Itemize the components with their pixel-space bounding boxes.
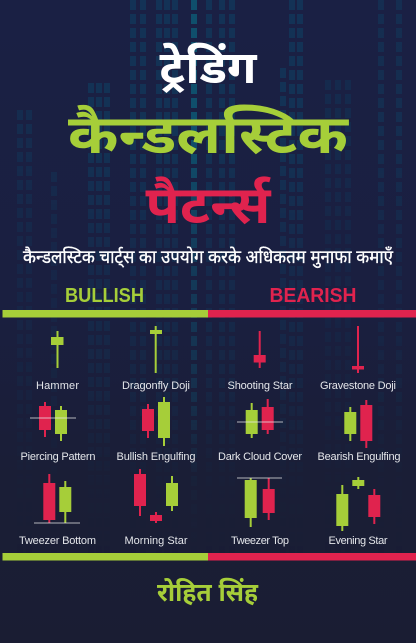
subtitle: कैन्डलस्टिक चार्ट्स का उपयोग करके अधिकतम मुनाफा कमाएँ <box>23 246 394 269</box>
heading: bullish: BULLISH <box>65 284 144 307</box>
heading: bearish: BEARISH <box>270 284 356 307</box>
candle: hammer <box>51 331 64 368</box>
title: trading: ट्रेडिंग <box>160 42 258 94</box>
title: candlestick: कैन्डलस्टिक <box>68 104 349 165</box>
candle: piercing pattern <box>30 402 76 441</box>
label: bearish engulfing: Bearish Engulfing <box>318 451 400 463</box>
label: morning star: Morning Star <box>124 535 188 547</box>
label: hammer: Hammer <box>36 380 79 392</box>
label: dragonfly doji: Dragonfly Doji <box>122 380 190 392</box>
label: tweezer bottom: Tweezer Bottom <box>19 535 96 547</box>
bottom bar <box>2 553 416 560</box>
label: shooting star: Shooting Star <box>228 380 293 392</box>
candle: dark cloud cover <box>237 399 283 438</box>
label: bullish engulfing: Bullish Engulfing <box>116 451 196 463</box>
label: tweezer top: Tweezer Top <box>231 535 289 547</box>
candle: bullish engulfing <box>142 397 170 446</box>
candle: tweezer bottom <box>34 474 80 524</box>
candle: evening star <box>336 477 380 531</box>
label: gravestone doji: Gravestone Doji <box>320 380 396 392</box>
candle: dragonfly doji <box>150 326 162 373</box>
title: patterns: पैटर्न्स <box>146 176 272 235</box>
label: dark cloud cover: Dark Cloud Cover <box>218 451 302 463</box>
candle: shooting star <box>254 331 266 368</box>
author: रोहित सिंह <box>157 577 259 607</box>
candle: gravestone doji <box>352 326 364 373</box>
candle: morning star <box>134 469 178 523</box>
candle: bearish engulfing <box>344 400 372 448</box>
label: piercing pattern: Piercing Pattern <box>20 451 96 463</box>
top bar <box>2 310 416 318</box>
candle: tweezer top <box>237 478 282 527</box>
label: evening star: Evening Star <box>328 535 388 547</box>
